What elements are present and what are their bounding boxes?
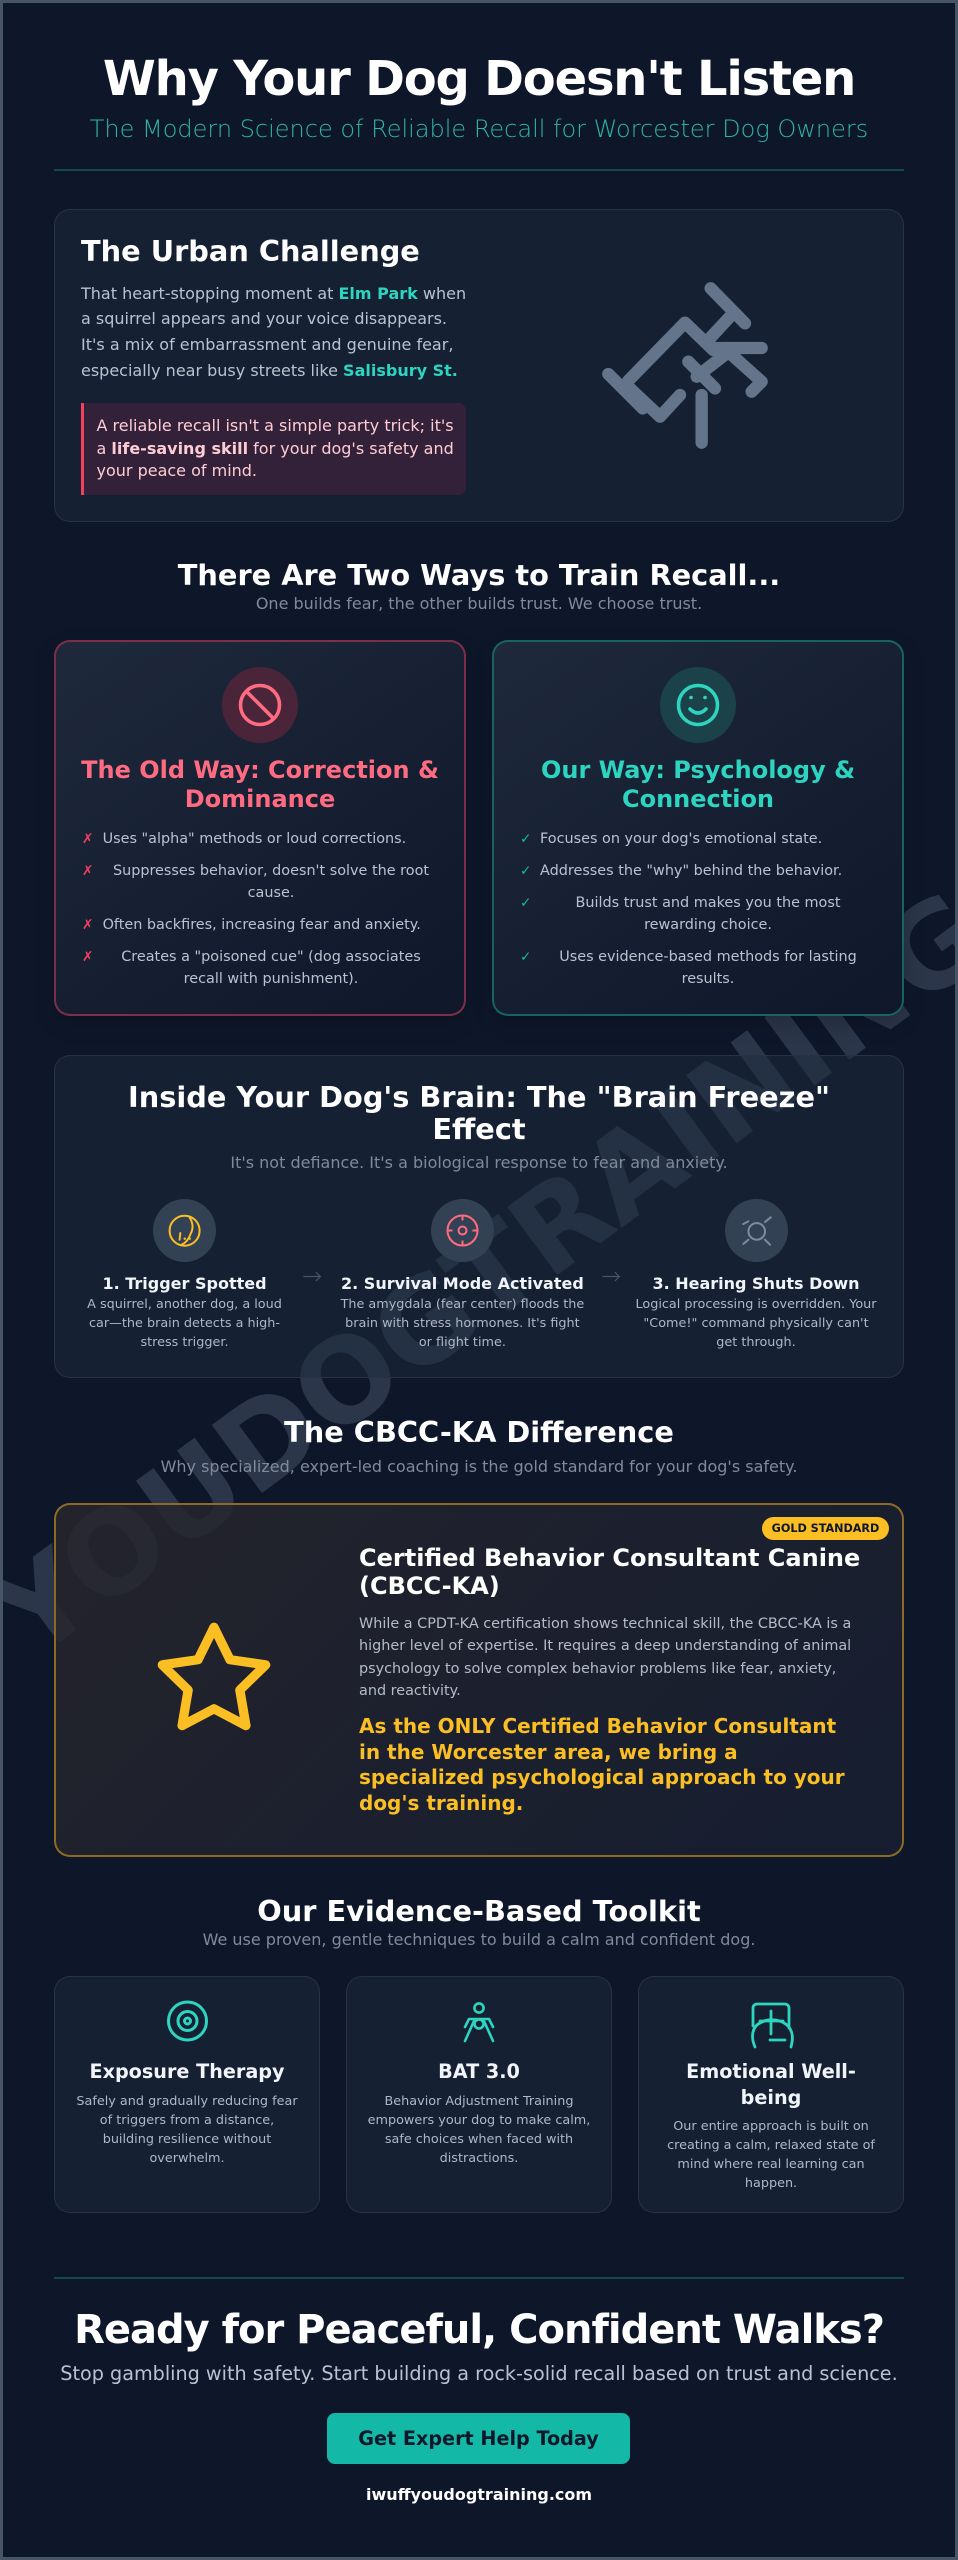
text: brain freeze subheading: It's not defiance. It's a biological response to fear and anxiety. (230, 1152, 728, 1172)
text: BAT description: Behavior Adjustment Training (385, 2094, 573, 2108)
text: BAT description: distractions. (440, 2151, 518, 2166)
list: our way items (520, 830, 857, 987)
text: two ways subheading: One builds fear, the other builds trust. We choose trust. (256, 594, 702, 612)
list: old way items: Suppresses behavior, doesn't solve the root (113, 862, 429, 878)
text: urban challenge paragraph: That heart-stopping moment at Elm Park when (81, 284, 466, 302)
text: exposure therapy description: Safely and gradually reducing fear (76, 2094, 298, 2108)
icon: dog (602, 282, 768, 449)
badge: gold standard (762, 1517, 889, 1540)
callout: only certified consultant: specialized psychological approach to your (359, 1765, 845, 1789)
button: get expert help (327, 2413, 630, 2464)
icon: target (167, 2000, 208, 2042)
panel: exposure therapy (54, 1976, 320, 2213)
heading: brain freeze (128, 1080, 830, 1146)
icon: squirrel (153, 1199, 216, 1262)
text: certification paragraph (359, 1616, 851, 1699)
list: old way items: ✗ (82, 948, 93, 964)
panel: emotional well-being (638, 1976, 904, 2213)
heading: old way: The Old Way: Correction & (81, 756, 439, 784)
list: old way items (82, 830, 429, 987)
list: our way items: Focuses on your dog's emotional state. (540, 830, 822, 846)
icon: star (158, 1622, 270, 1730)
heading: certified behavior consultant: Certified Behavior Consultant Canine (359, 1544, 860, 1572)
icon: hearing off (724, 1199, 788, 1262)
subtitle: The Modern Science of Reliable Recall for Worcester Dog Owners (90, 115, 868, 143)
list: our way items: ✓ (520, 894, 531, 910)
icon: person (464, 2002, 494, 2042)
text: step 3 description: get through. (716, 1335, 796, 1350)
text: emotional well-being description (667, 2119, 876, 2191)
list: old way items: Uses "alpha" methods or loud corrections. (103, 830, 406, 846)
list: our way items: Uses evidence-based methods for lasting (559, 948, 857, 964)
text: call to action sub: Stop gambling with safety. Start building a rock-solid recall based on trust and science. (60, 2362, 898, 2385)
callout: only certified consultant: in the Worcester area, we bring a (359, 1740, 738, 1764)
icon: ban (222, 667, 298, 743)
text: BAT description (368, 2094, 590, 2166)
step 2: survival mode (340, 1199, 584, 1350)
callout: life-saving skill: your peace of mind. (96, 461, 257, 480)
text: step 1 description: A squirrel, another dog, a loud (87, 1297, 282, 1312)
list: our way items: results. (682, 971, 734, 987)
text: exposure therapy description: building resilience without (103, 2132, 271, 2147)
text: emotional well-being description: Our entire approach is built on (673, 2119, 869, 2134)
text: certification paragraph: psychology to solve complex behavior problems like fear, anxiety, (359, 1661, 836, 1677)
panel: urban challenge (54, 209, 904, 522)
list: old way items: cause. (248, 885, 294, 901)
panel: BAT 3.0 (346, 1976, 612, 2213)
text: step 1 description (87, 1297, 282, 1350)
arrow: step 2 to 3: → (601, 1262, 621, 1290)
panel: our way (492, 640, 904, 1016)
heading: certified behavior consultant (359, 1544, 860, 1600)
list: our way items: ✓ (520, 948, 531, 964)
text: exposure therapy description: overwhelm. (149, 2151, 225, 2166)
text: step 2 description: The amygdala (fear center) floods the (341, 1297, 584, 1312)
list: old way items: Creates a "poisoned cue" (dog associates (121, 948, 421, 964)
text: urban challenge paragraph: especially near busy streets like Salisbury St. (81, 361, 458, 380)
heading: old way (81, 756, 439, 813)
icon: smile (660, 667, 736, 743)
text: step 1 description: car—the brain detects a high- (89, 1316, 280, 1331)
text: step 1 description: stress trigger. (140, 1335, 229, 1350)
text: BAT description: safe choices when faced with (385, 2132, 573, 2147)
heading: two ways: There Are Two Ways to Train Recall... (178, 558, 780, 592)
text: step 3 description: "Come!" command physically can't (643, 1316, 869, 1331)
heading: urban challenge: The Urban Challenge (81, 234, 420, 268)
icon: crosshair (431, 1199, 494, 1262)
text: emotional well-being title: Emotional Well- (686, 2060, 856, 2083)
step 3: hearing shuts down (635, 1199, 877, 1350)
text: step 2 description (340, 1297, 584, 1350)
heading: certified behavior consultant: (CBCC-KA) (359, 1572, 500, 1600)
button: get expert help: Get Expert Help Today (358, 2427, 599, 2450)
list: our way items: Addresses the "why" behind the behavior. (540, 862, 842, 878)
text: step 2 title: 2. Survival Mode Activated (341, 1274, 584, 1293)
text: emotional well-being title (686, 2060, 856, 2109)
text: exposure therapy description: of triggers from a distance, (100, 2113, 274, 2128)
text: BAT description: empowers your dog to make calm, (368, 2113, 590, 2128)
step 1: trigger spotted (87, 1199, 282, 1350)
heading: brain freeze: Effect (432, 1112, 526, 1146)
panel: gold standard (54, 1503, 904, 1857)
text: certification paragraph: higher level of expertise. It requires a deep understanding of animal (359, 1638, 851, 1654)
callout: life-saving skill: A reliable recall isn't a simple party trick; it's (96, 416, 454, 435)
text: emotional well-being description: mind where real learning can (677, 2157, 865, 2172)
text: urban challenge paragraph (80, 284, 466, 380)
text: urban challenge paragraph: a squirrel appears and your voice disappears. (81, 309, 447, 328)
heading: our way: Connection (622, 785, 774, 813)
text: certification paragraph: and reactivity. (359, 1683, 461, 1699)
text: BAT title: BAT 3.0 (438, 2060, 520, 2083)
text: emotional well-being title: being (741, 2086, 801, 2109)
text: exposure therapy description (76, 2094, 298, 2166)
callout: only certified consultant: As the ONLY Certified Behavior Consultant (359, 1714, 836, 1738)
callout: only certified consultant (359, 1714, 845, 1815)
badge: gold standard: GOLD STANDARD (772, 1522, 879, 1535)
text: website: iwuffyoudogtraining.com (366, 2484, 592, 2504)
callout: life-saving skill: a life-saving skill for your dog's safety and (96, 439, 454, 458)
heading: our way: Our Way: Psychology & (541, 756, 855, 784)
callout: only certified consultant: dog's training. (359, 1791, 523, 1815)
heading: our way (541, 756, 855, 813)
heading: toolkit: Our Evidence-Based Toolkit (257, 1894, 701, 1928)
text: step 2 description: or flight time. (419, 1335, 506, 1350)
list: old way items: ✗ (82, 830, 93, 846)
text: urban challenge paragraph: It's a mix of embarrassment and genuine fear, (81, 335, 453, 354)
text: step 3 title: 3. Hearing Shuts Down (652, 1274, 860, 1293)
text: step 1 title: 1. Trigger Spotted (102, 1274, 267, 1293)
panel: the old way (54, 640, 466, 1016)
text: step 3 description: Logical processing is overridden. Your (635, 1297, 877, 1312)
list: old way items: ✗ (82, 862, 93, 878)
list: old way items: recall with punishment). (184, 971, 358, 987)
title: Why Your Dog Doesn't Listen (103, 51, 855, 107)
text: toolkit subheading: We use proven, gentle techniques to build a calm and confident dog. (203, 1930, 755, 1948)
text: CBCC-KA subheading: Why specialized, expert-led coaching is the gold standard for your dog's safety. (161, 1456, 797, 1476)
panel: brain freeze (54, 1055, 904, 1378)
text: certification paragraph: While a CPDT-KA certification shows technical skill, the CBCC-KA is a (359, 1616, 851, 1632)
list: our way items: ✓ (520, 862, 531, 878)
list: old way items: ✗ (82, 916, 93, 932)
list: our way items: Builds trust and makes you the most (576, 894, 840, 910)
text: step 3 description (635, 1297, 877, 1350)
icon: heart monitor (751, 2002, 794, 2048)
heading: old way: Dominance (185, 785, 335, 813)
arrow: step 1 to 2: → (302, 1262, 322, 1290)
list: our way items: ✓ (520, 830, 531, 846)
text: exposure therapy title: Exposure Therapy (89, 2060, 285, 2083)
list: our way items: rewarding choice. (644, 917, 772, 933)
text: emotional well-being description: creating a calm, relaxed state of (667, 2138, 875, 2153)
heading: brain freeze: Inside Your Dog's Brain: The "Brain Freeze" (128, 1080, 830, 1114)
heading: CBCC-KA difference: The CBCC-KA Difference (284, 1415, 674, 1449)
list: old way items: Often backfires, increasing fear and anxiety. (103, 916, 421, 932)
text: emotional well-being description: happen. (745, 2176, 797, 2191)
heading: call to action: Ready for Peaceful, Confident Walks? (74, 2307, 884, 2353)
callout: life-saving skill (81, 403, 466, 495)
text: step 2 description: brain with stress hormones. It's fight (345, 1316, 580, 1331)
